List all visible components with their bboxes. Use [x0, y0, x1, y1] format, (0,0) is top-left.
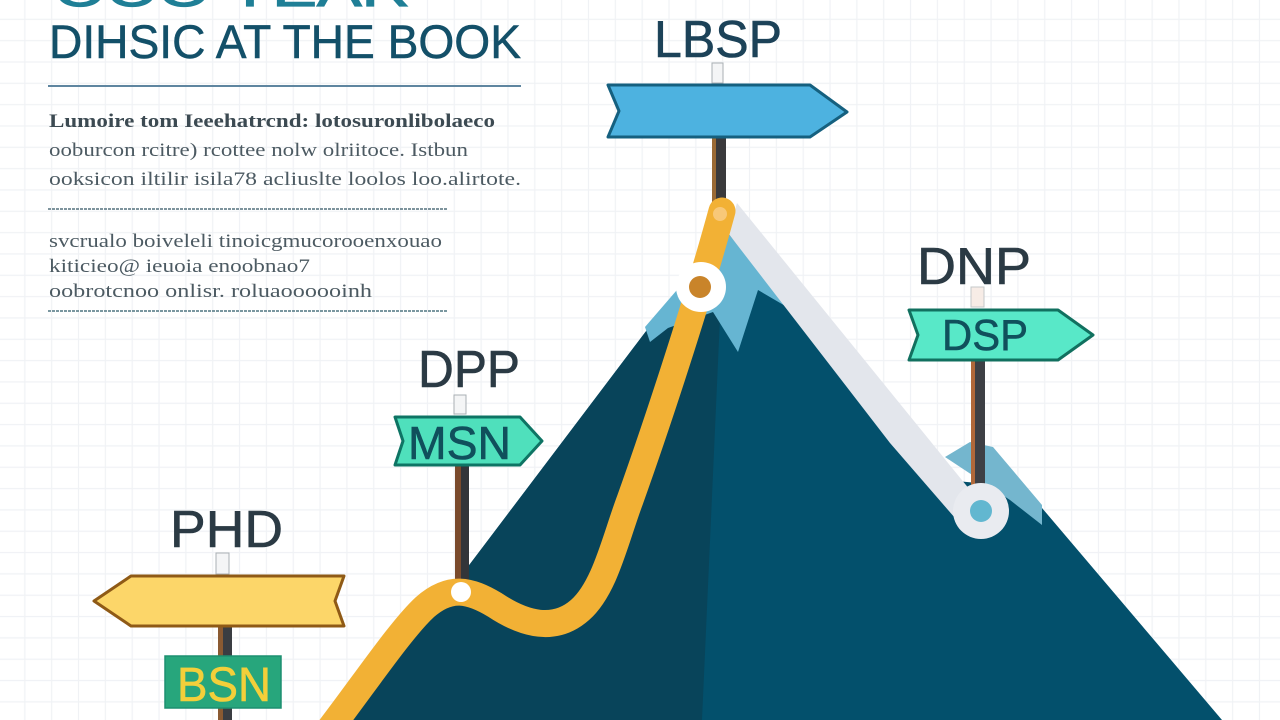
mountain — [352, 228, 1222, 720]
summit waypoint — [676, 262, 726, 312]
sign: DPP with MSN: MSN — [408, 417, 511, 469]
secondary text block: svcrualo boiveleli tinoicgmucorooenxouao — [49, 231, 442, 252]
sign: LBSP — [608, 85, 847, 137]
sign: PHD — [94, 576, 344, 626]
ridge trail — [728, 203, 1009, 539]
label: PHD: PHD — [170, 501, 283, 559]
post: PHD — [218, 625, 232, 720]
sign: DPP with MSN — [395, 417, 542, 469]
snow cap: right shoulder — [945, 442, 1042, 525]
label: DNP: DNP — [917, 238, 1031, 296]
secondary text block — [49, 231, 442, 302]
secondary text block: kiticieo@ ieuoia enoobnao7 — [49, 256, 310, 277]
intro text block: Lumoire tom Ieeehatrcnd: lotosuronlibolaeco — [49, 111, 495, 132]
intro text block: ooburcon rcitre) rcottee nolw olriitoce. Istbun — [49, 140, 469, 161]
sign: DNP with DSP — [909, 310, 1093, 360]
secondary text block: oobrotcnoo onlisr. roluaoooooinh — [49, 281, 373, 302]
post: DNP — [971, 358, 985, 486]
intro text block: ooksicon iltilir isila78 acliuslte loolos loo.alirtote. — [49, 169, 521, 190]
label: LBSP: LBSP — [654, 11, 782, 69]
sign: BSN: BSN — [177, 659, 271, 712]
ridge waypoint — [953, 483, 1009, 539]
sign: DNP with DSP: DSP — [942, 311, 1028, 360]
career path curve — [325, 207, 727, 720]
intro text block — [49, 111, 521, 190]
lower waypoint — [451, 582, 471, 602]
label: DPP: DPP — [418, 341, 520, 399]
post: LBSP — [712, 135, 726, 215]
post: DPP — [455, 460, 469, 580]
snow cap: summit — [645, 232, 795, 352]
title: DIHSIC AT THE BOOK — [49, 15, 521, 68]
